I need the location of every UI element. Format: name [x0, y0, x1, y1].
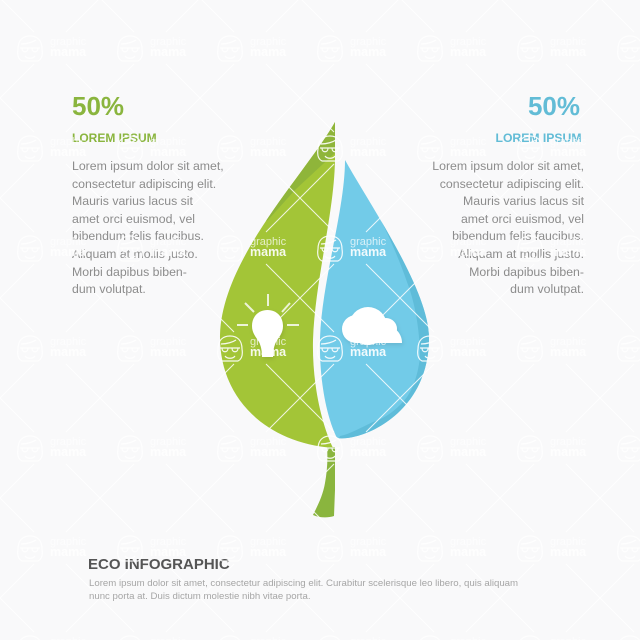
left text block: consectetur adipiscing elit.	[72, 177, 216, 191]
right percentage: 50%	[528, 91, 580, 121]
left text block: Aliquam at mollis justo.	[72, 247, 198, 261]
right text block: Lorem ipsum dolor sit amet,	[432, 159, 584, 173]
icon: cloud	[342, 307, 402, 345]
right text block: amet orci euismod, vel	[461, 212, 584, 226]
right text block: dum volutpat.	[510, 282, 584, 296]
icon: light bulb	[237, 294, 299, 357]
blue leaf half	[320, 160, 429, 438]
blue leaf shade	[339, 222, 429, 438]
left heading: LOREM IPSUM	[72, 131, 157, 145]
left text block: Mauris varius lacus sit	[72, 194, 193, 208]
right heading: LOREM IPSUM	[496, 131, 582, 145]
leaf stem	[313, 447, 335, 517]
right text block	[432, 159, 584, 296]
left text block: bibendum felis faucibus.	[72, 229, 204, 243]
right text block: Morbi dapibus biben-	[469, 265, 584, 279]
footer title: ECO INFOGRAPHIC	[88, 556, 230, 573]
footer text block: nunc porta at. Duis dictum molestie nibh vitae porta.	[89, 590, 310, 602]
left text block: dum volutpat.	[72, 282, 146, 296]
right text block: Mauris varius lacus sit	[463, 194, 584, 208]
left text block: Lorem ipsum dolor sit amet,	[72, 159, 224, 173]
left text block: amet orci euismod, vel	[72, 212, 195, 226]
green leaf shade	[266, 122, 335, 221]
right text block: consectetur adipiscing elit.	[440, 177, 584, 191]
left text block: Morbi dapibus biben-	[72, 265, 187, 279]
left text block	[72, 159, 224, 296]
left percentage: 50%	[72, 91, 124, 121]
leaf illustration	[220, 122, 429, 518]
right text block: Aliquam at mollis justo.	[458, 247, 584, 261]
right text block: bibendum felis faucibus.	[452, 229, 584, 243]
footer text block	[89, 578, 518, 602]
footer text block: Lorem ipsum dolor sit amet, consectetur adipiscing elit. Curabitur scelerisque leo libero, quis aliquam	[89, 578, 518, 589]
green leaf half	[220, 122, 335, 448]
